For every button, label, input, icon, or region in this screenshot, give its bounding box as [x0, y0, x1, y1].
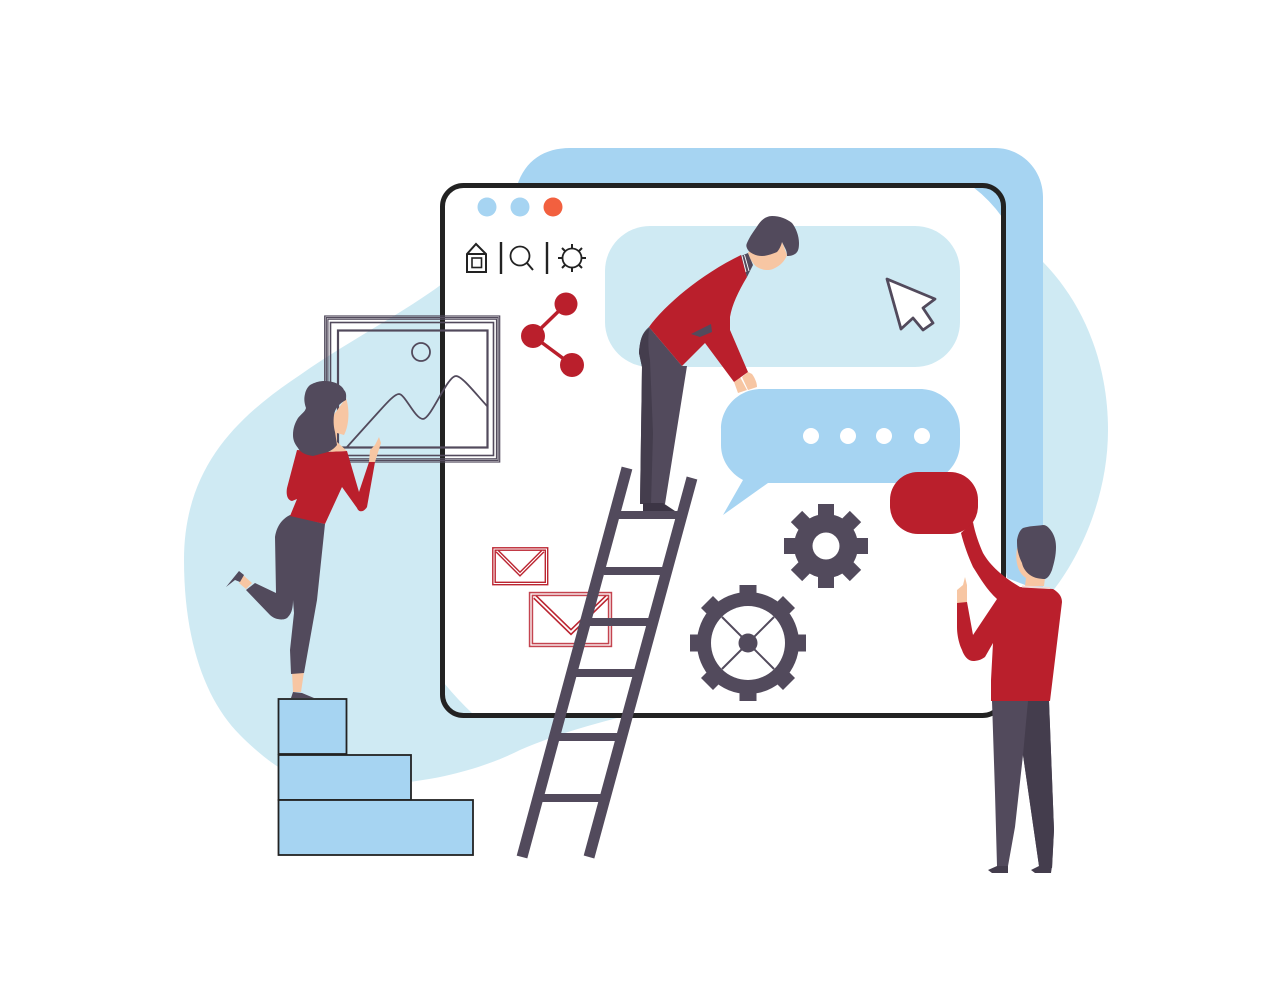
- man on right: [957, 522, 1062, 873]
- trousers shadow: [639, 329, 653, 504]
- neck: [1016, 548, 1045, 586]
- chat bubble blue: [721, 389, 960, 515]
- divider: [546, 242, 548, 274]
- envelope small: [494, 549, 546, 584]
- trousers: [992, 701, 1054, 868]
- red top: [287, 450, 375, 524]
- man on ladder: [639, 216, 799, 511]
- hand: [369, 437, 381, 462]
- hands: [734, 372, 757, 393]
- red sweater: [649, 255, 748, 382]
- pointing hand: [957, 577, 967, 604]
- icon: share: [521, 292, 584, 377]
- collar: [741, 253, 753, 277]
- raised shoe: [226, 571, 244, 587]
- hair: [293, 381, 346, 456]
- toolbar icons: [467, 242, 586, 274]
- envelopes: [494, 549, 610, 645]
- window outline: [442, 186, 1004, 716]
- raised foot skin: [239, 575, 252, 589]
- shoe: [643, 503, 675, 511]
- gear large: [690, 585, 806, 701]
- hair: [1017, 525, 1056, 579]
- blue back frame: [517, 148, 1043, 592]
- red sweater and arms: [957, 522, 1062, 701]
- window white fill: [444, 187, 1002, 714]
- neck and face: [325, 398, 348, 452]
- collar: [1022, 586, 1050, 588]
- picture frame: [325, 316, 500, 462]
- arm crease: [691, 324, 712, 337]
- icon: search: [510, 246, 533, 270]
- envelope large: [531, 594, 610, 645]
- background blob left: [184, 284, 625, 783]
- window control dots: [478, 198, 562, 216]
- woman figure: [226, 381, 381, 698]
- hair: [746, 216, 799, 256]
- divider: [500, 242, 502, 274]
- trousers shadow: [1023, 701, 1054, 868]
- trousers: [246, 515, 325, 674]
- background blob right: [1043, 262, 1108, 592]
- stairs: [278, 699, 473, 855]
- speech bubble red: [890, 472, 978, 534]
- icon: sun: [558, 244, 586, 272]
- standing leg skin: [292, 672, 304, 692]
- shoes: [988, 866, 1052, 873]
- light content panel: [605, 226, 960, 367]
- icon: cursor arrow: [887, 279, 935, 330]
- ladder: [522, 468, 692, 857]
- collar stripes: [742, 255, 749, 272]
- standing shoe: [291, 692, 314, 698]
- face: [748, 242, 787, 270]
- gear small: [784, 504, 868, 588]
- icon: home: [467, 244, 486, 272]
- trousers: [639, 327, 687, 504]
